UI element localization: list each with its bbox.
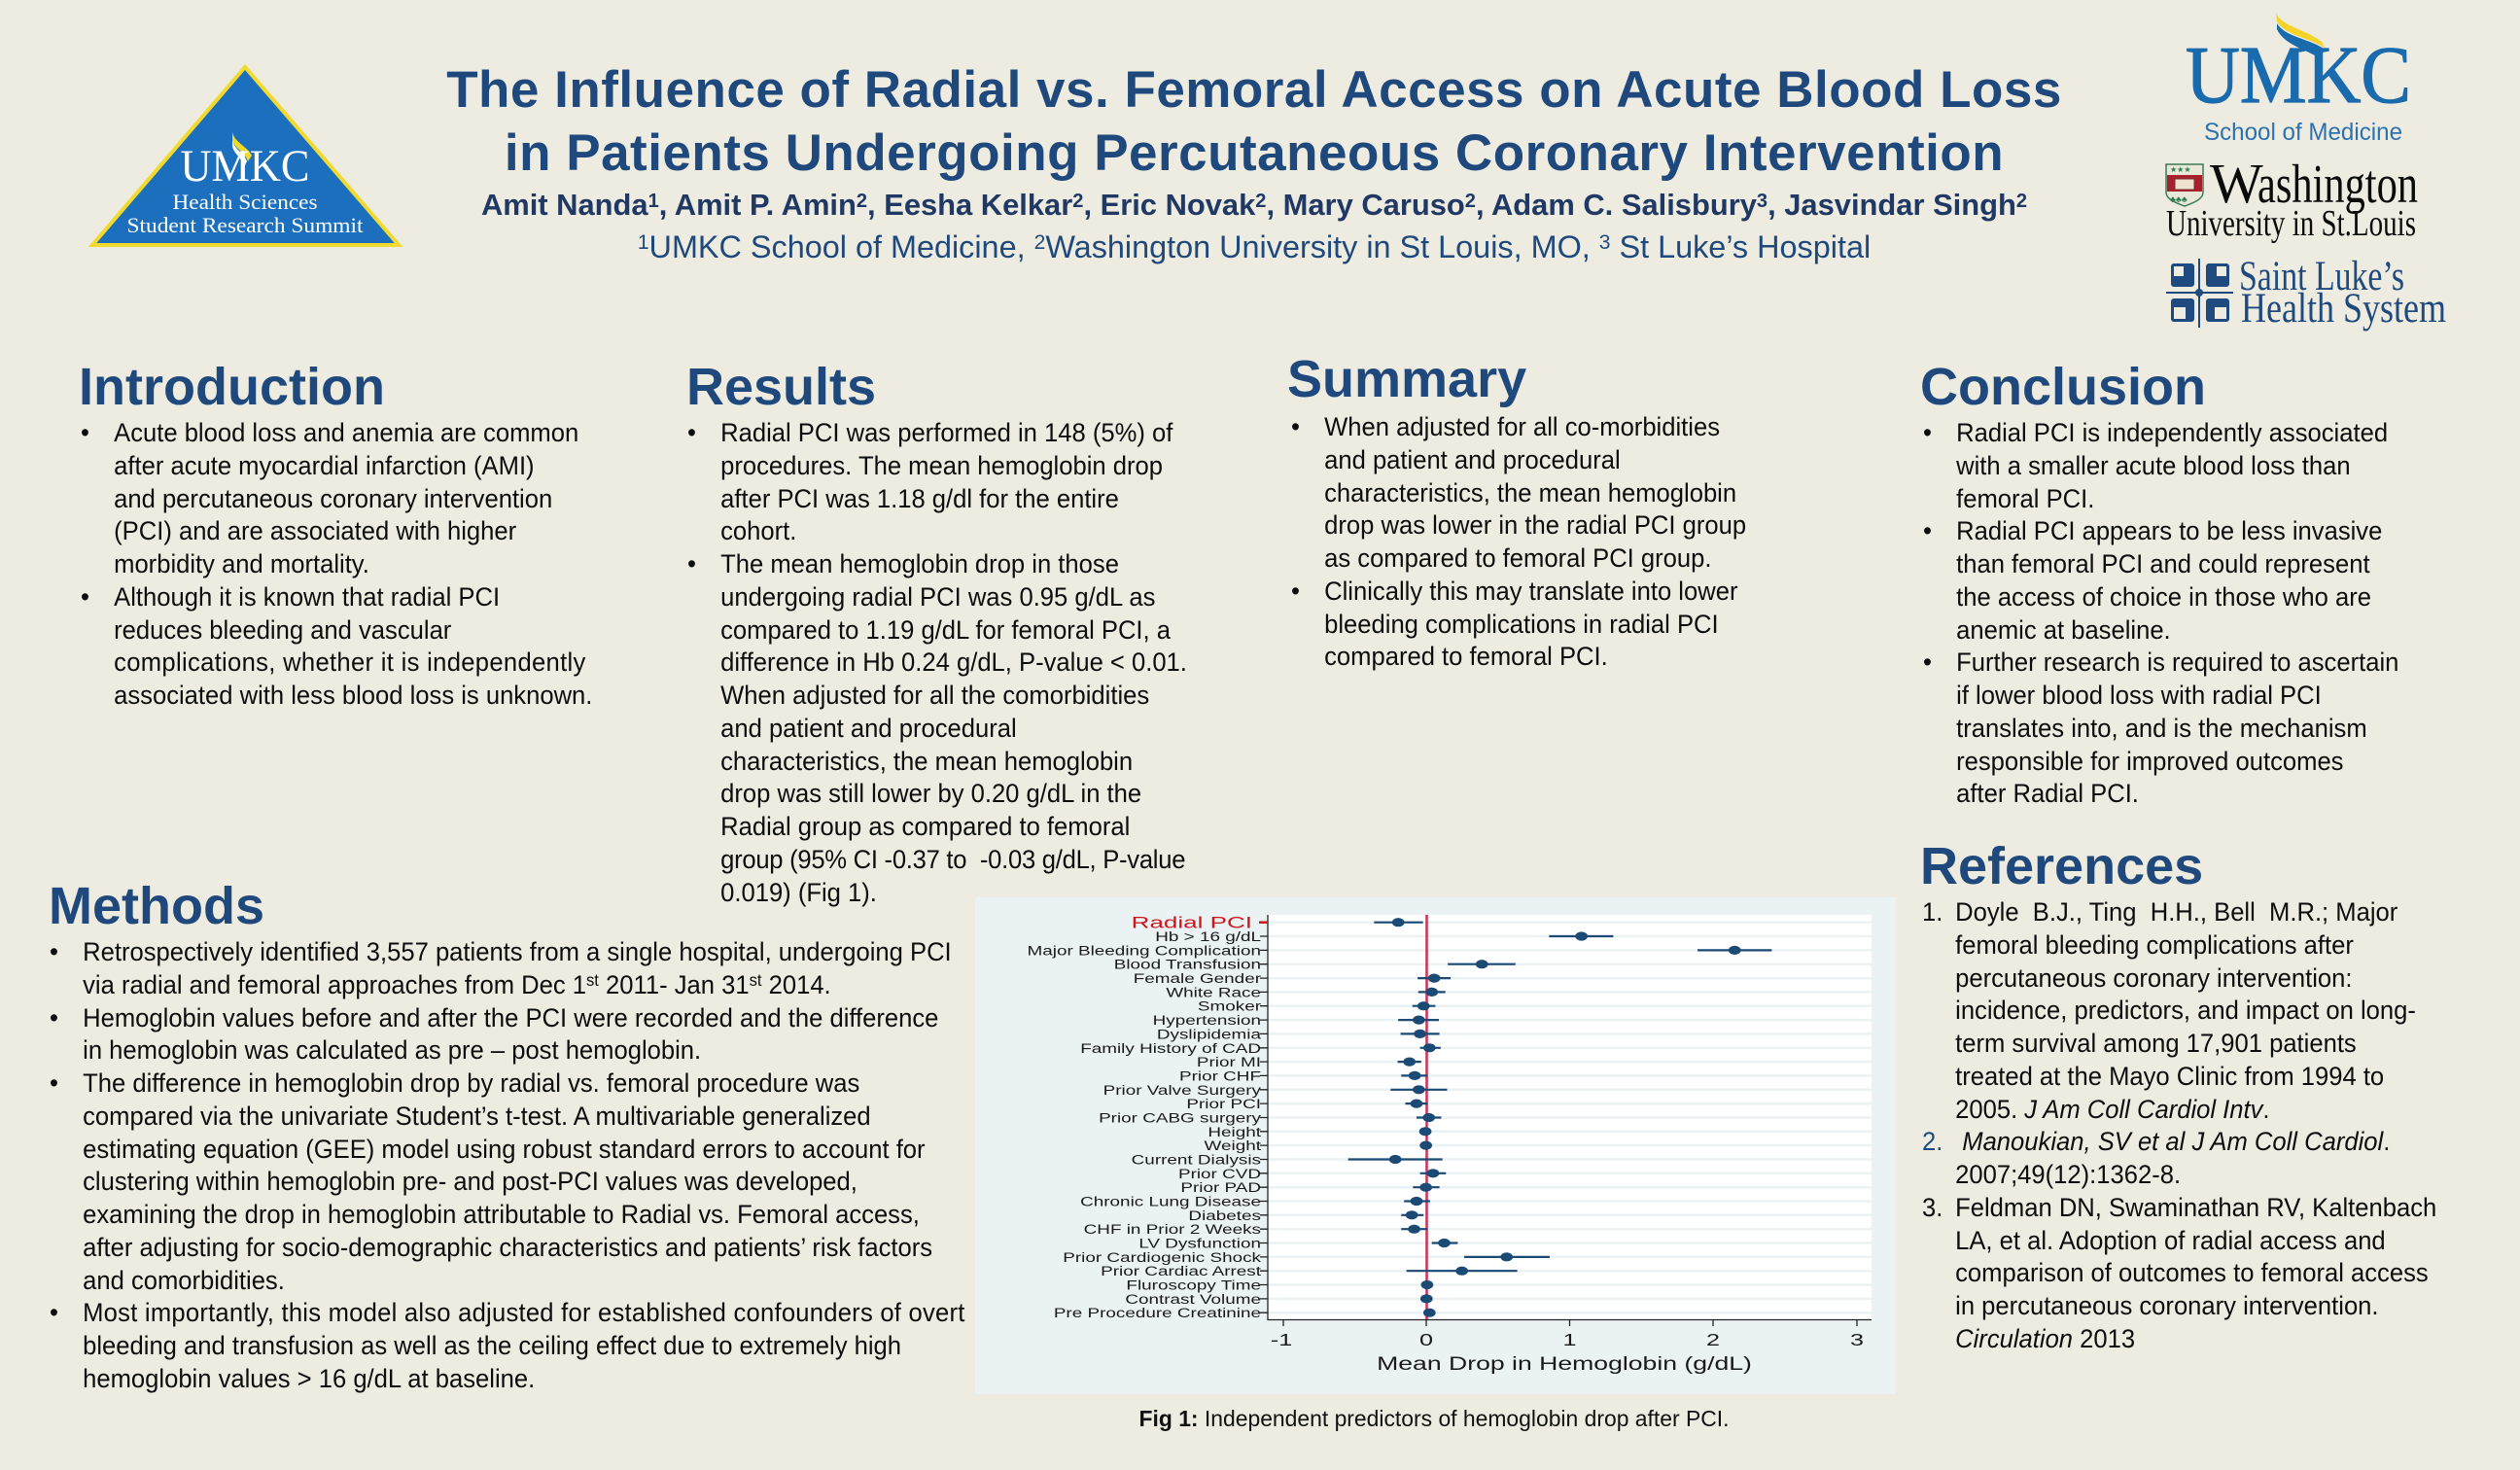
heading: Methods: Methods [49, 877, 264, 935]
text: conclusion bullets: responsible for improved outcomes [1956, 747, 2343, 776]
text: methods bullets: examining the drop in hemoglobin attributable to Radial vs. Femoral access, [83, 1200, 920, 1229]
text: summary bullets: drop was lower in the radial PCI group [1324, 510, 1746, 540]
y axis labels: Prior MI [1197, 1054, 1261, 1069]
logo: UMKC School of Medicine [2186, 12, 2411, 146]
y axis labels: Hb > 16 g/dL [1155, 928, 1261, 944]
text: conclusion bullets: if lower blood loss with radial PCI [1956, 681, 2322, 710]
heading: Results: Results [686, 358, 876, 416]
text: reference list: 1. [1922, 897, 1942, 927]
text: conclusion bullets: Further research is required to ascertain [1956, 648, 2398, 677]
logo: Saint Luke's Health System: Health System [2241, 286, 2446, 332]
title [446, 61, 2062, 182]
logo: Washington University in St. Louis [2165, 152, 2418, 244]
text: methods bullets: Hemoglobin values before and after the PCI were recorded and the difference [83, 1003, 938, 1032]
text: results bullets: 0.019) (Fig 1). [720, 877, 877, 906]
text: methods bullets: via radial and femoral approaches from Dec 1st 2011- Jan 31st 2014. [83, 970, 831, 999]
title: in Patients Undergoing Percutaneous Coronary Intervention [505, 124, 2004, 182]
text: conclusion bullets: femoral PCI. [1956, 484, 2094, 513]
text: reference list: femoral bleeding complications after [1955, 930, 2354, 960]
text: results bullets: after PCI was 1.18 g/dl for the entire [720, 484, 1119, 513]
text: introduction bullets: (PCI) and are associated with higher [114, 516, 516, 545]
text: introduction bullets: reduces bleeding and vascular [114, 614, 451, 644]
text: conclusion bullets: translates into, and is the mechanism [1956, 714, 2367, 743]
text: methods bullets: estimating equation (GEE) model using robust standard errors to account for [83, 1134, 926, 1163]
text: conclusion bullets: anemic at baseline. [1956, 614, 2171, 644]
y axis labels: Current Dialysis [1132, 1152, 1261, 1168]
x axis tick labels: 3 [1850, 1330, 1864, 1349]
title: The Influence of Radial vs. Femoral Access on Acute Blood Loss [446, 61, 2062, 119]
y axis labels: White Race [1166, 985, 1261, 1000]
text: reference list: Feldman DN, Swaminathan RV, Kaltenbach [1955, 1193, 2436, 1222]
logo: UMKC Health Sciences Student Research Summit triangle: UMKC [181, 141, 309, 192]
y axis labels: Prior PCI [1186, 1096, 1261, 1111]
y axis labels: Major Bleeding Complication [1028, 943, 1261, 959]
text: summary bullets: characteristics, the mean hemoglobin [1324, 478, 1736, 508]
text: methods bullets: in hemoglobin was calculated as pre – post hemoglobin. [83, 1035, 701, 1065]
text: conclusion bullets: after Radial PCI. [1956, 779, 2139, 808]
text: results bullets: procedures. The mean hemoglobin drop [720, 451, 1163, 480]
panel: Conclusion [1920, 358, 2398, 808]
chart: forest plot of independent predictors of hemoglobin drop [975, 897, 1896, 1394]
x axis tick labels [1271, 1330, 1864, 1349]
text: conclusion bullets: than femoral PCI and could represent [1956, 549, 2370, 578]
text: summary bullets [1292, 412, 1746, 671]
heading: Introduction: Introduction [79, 358, 385, 416]
point estimates with confidence intervals [1348, 918, 1771, 1317]
text: summary bullets: as compared to femoral PCI group. [1324, 543, 1711, 573]
text: introduction bullets [82, 418, 592, 710]
x axis tick labels: 1 [1562, 1330, 1577, 1349]
logo: Washington University in St. Louis: University in St.Louis [2166, 203, 2416, 244]
y axis labels: Female Gender [1134, 970, 1262, 986]
text: methods bullets: clustering within hemoglobin pre- and post-PCI values was developed, [83, 1167, 858, 1196]
logo: Washington University in St. Louis: ★★★ [2170, 165, 2191, 174]
y axis labels: Diabetes [1188, 1208, 1261, 1223]
logo: UMKC Health Sciences Student Research Summit triangle [88, 64, 402, 247]
logo: UMKC Health Sciences Student Research Summit triangle: Student Research Summit [126, 213, 364, 237]
panel: References [1920, 837, 2436, 1353]
text: introduction bullets: morbidity and mortality. [114, 549, 369, 578]
y axis labels: Contrast Volume [1125, 1291, 1261, 1307]
text: reference list: term survival among 17,901 patients [1955, 1029, 2357, 1058]
text: introduction bullets: associated with less blood loss is unknown. [114, 681, 592, 710]
text: introduction bullets: Although it is known that radial PCI [114, 582, 500, 612]
text: reference list: 2007;49(12):1362-8. [1955, 1160, 2181, 1189]
y axis labels: Prior CVD [1178, 1166, 1261, 1181]
text: methods bullets: and comorbidities. [83, 1266, 285, 1295]
x axis title: Mean Drop in Hemoglobin (g/dL) [1377, 1353, 1752, 1374]
text: reference list: 2005. J Am Coll Cardiol Intv. [1955, 1095, 2270, 1124]
y axis labels: Dyslipidemia [1157, 1027, 1262, 1042]
logo: UMKC School of Medicine: UMKC [2186, 30, 2411, 121]
y axis labels: CHF in Prior 2 Weeks [1084, 1222, 1261, 1238]
text: summary bullets: When adjusted for all co-morbidities [1324, 412, 1720, 441]
x axis tick labels: 0 [1419, 1330, 1433, 1349]
y axis labels: Family History of CAD [1080, 1040, 1261, 1056]
text: results bullets: group (95% CI -0.37 to -0.03 g/dL, P-value [720, 845, 1185, 874]
x axis tick labels: -1 [1271, 1330, 1292, 1349]
y axis labels: LV Dysfunction [1138, 1236, 1261, 1251]
text: introduction bullets: after acute myocardial infarction (AMI) [114, 451, 535, 480]
authors: Amit Nanda1, Amit P. Amin2, Eesha Kelkar2, Eric Novak2, Mary Caruso2, Adam C. Salisbury3, Jasvindar Singh2 [481, 188, 2027, 222]
text: conclusion bullets [1924, 418, 2398, 808]
y axis labels: Prior Valve Surgery [1103, 1082, 1262, 1098]
reference line at zero [1425, 915, 1428, 1319]
logo: Washington University in St. Louis: ashington [2258, 155, 2418, 215]
logo: Saint Luke's Health System [2166, 254, 2446, 332]
text: results bullets: Radial PCI was performed in 148 (5%) of [720, 418, 1172, 447]
y axis labels: Blood Transfusion [1114, 957, 1261, 972]
y axis labels: Hypertension [1153, 1012, 1261, 1028]
text: results bullets: drop was still lower by 0.20 g/dL in the [720, 779, 1141, 808]
text: reference list: 2. [1922, 1127, 1942, 1156]
y axis labels: Prior Cardiac Arrest [1101, 1264, 1261, 1279]
y axis labels: Chronic Lung Disease [1080, 1194, 1261, 1209]
text: summary bullets: Clinically this may translate into lower [1324, 577, 1737, 606]
text: reference list: Doyle B.J., Ting H.H., Bell M.R.; Major [1955, 897, 2398, 927]
heading: Conclusion: Conclusion [1920, 358, 2206, 416]
text: methods bullets: Most importantly, this model also adjusted for established confounders of overt [83, 1298, 965, 1327]
text: results bullets: cohort. [720, 516, 796, 545]
text: conclusion bullets: with a smaller acute blood loss than [1956, 451, 2351, 480]
text: methods bullets: compared via the univariate Student’s t-test. A multivariable generalized [83, 1102, 871, 1131]
text: conclusion bullets: Radial PCI is independently associated [1956, 418, 2388, 447]
panel: Methods [49, 877, 965, 1393]
text: reference list: treated at the Mayo Clinic from 1994 to [1955, 1062, 2384, 1091]
text: methods bullets: The difference in hemoglobin drop by radial vs. femoral procedure was [83, 1068, 859, 1098]
panel: Summary [1287, 350, 1746, 671]
y axis labels: Fluroscopy Time [1126, 1278, 1261, 1293]
text: reference list: Circulation 2013 [1955, 1324, 2135, 1353]
text: results bullets: difference in Hb 0.24 g/dL, P-value < 0.01. [720, 648, 1187, 677]
x axis tick labels: 2 [1706, 1330, 1720, 1349]
text: results bullets: When adjusted for all the comorbidities [720, 681, 1149, 710]
logo: Washington University in St. Louis: ♣♣♣ [2170, 194, 2188, 204]
y axis labels: Prior PAD [1180, 1180, 1261, 1196]
text: reference list: comparison of outcomes to femoral access [1955, 1258, 2429, 1287]
y axis labels: Prior CABG surgery [1099, 1110, 1262, 1126]
text: conclusion bullets: the access of choice in those who are [1956, 582, 2371, 612]
y axis labels: Prior CHF [1179, 1068, 1261, 1084]
text: methods bullets: after adjusting for socio-demographic characteristics and patients’ risk factors [83, 1233, 932, 1262]
text: results bullets: undergoing radial PCI was 0.95 g/dL as [720, 582, 1155, 612]
text: summary bullets: compared to femoral PCI. [1324, 642, 1608, 671]
text: reference list: 3. [1922, 1193, 1942, 1222]
text: results bullets: The mean hemoglobin drop in those [720, 549, 1119, 578]
text: reference list: LA, et al. Adoption of radial access and [1955, 1225, 2386, 1254]
logo: UMKC School of Medicine: School of Medicine [2204, 119, 2402, 146]
text: introduction bullets: Acute blood loss and anemia are common [114, 418, 578, 447]
panel: Introduction [79, 358, 592, 710]
y axis labels: Prior Cardiogenic Shock [1063, 1249, 1262, 1265]
text: reference list: incidence, predictors, and impact on long- [1955, 996, 2416, 1025]
text: methods bullets: hemoglobin values > 16 g/dL at baseline. [83, 1364, 535, 1393]
text: introduction bullets: and percutaneous coronary intervention [114, 484, 552, 513]
panel: Results [686, 358, 1187, 906]
text: conclusion bullets: Radial PCI appears to be less invasive [1956, 516, 2382, 545]
logo: Saint Luke's Health System: Saint Luke’s [2239, 254, 2404, 299]
y axis labels: Pre Procedure Creatinine [1054, 1306, 1261, 1321]
text: reference list [1922, 897, 2436, 1353]
caption: figure 1: Fig 1: Independent predictors of hemoglobin drop after PCI. [1139, 1406, 1729, 1431]
text: methods bullets: bleeding and transfusion as well as the ceiling effect due to extremely high [83, 1331, 901, 1360]
y axis labels: Smoker [1198, 998, 1262, 1014]
text: results bullets: and patient and procedural [720, 714, 1017, 743]
text: results bullets [688, 418, 1187, 906]
heading: References: References [1920, 837, 2203, 895]
text: reference list: in percutaneous coronary intervention. [1955, 1291, 2379, 1320]
logo: Washington University in St. Louis: W [2210, 152, 2263, 215]
heading: Summary: Summary [1287, 350, 1526, 408]
text: summary bullets: bleeding complications in radial PCI [1324, 609, 1719, 638]
axes and ticks [1260, 915, 1872, 1326]
text: methods bullets: Retrospectively identified 3,557 patients from a single hospital, undergoing PCI [83, 937, 952, 966]
text: reference list: percutaneous coronary intervention: [1955, 962, 2352, 992]
text: reference list: Manoukian, SV et al J Am Coll Cardiol. [1962, 1127, 2390, 1156]
text: summary bullets: and patient and procedural [1324, 445, 1621, 474]
highlighted label: Radial PCI: Radial PCI [1132, 913, 1252, 931]
y axis labels [1028, 928, 1262, 1321]
y axis labels: Weight [1205, 1138, 1261, 1153]
text: results bullets: characteristics, the mean hemoglobin [720, 747, 1133, 776]
text: methods bullets [51, 937, 965, 1393]
text: introduction bullets: complications, whether it is independently [114, 648, 586, 677]
text: results bullets: compared to 1.19 g/dL for femoral PCI, a [720, 614, 1171, 644]
affiliations: 1UMKC School of Medicine, 2Washington University in St Louis, MO, 3 St Luke’s Hospital [638, 229, 1871, 264]
logo: UMKC Health Sciences Student Research Summit triangle: Health Sciences [173, 190, 317, 214]
y axis labels: Height [1208, 1124, 1261, 1139]
text: results bullets: Radial group as compared to femoral [720, 812, 1130, 841]
